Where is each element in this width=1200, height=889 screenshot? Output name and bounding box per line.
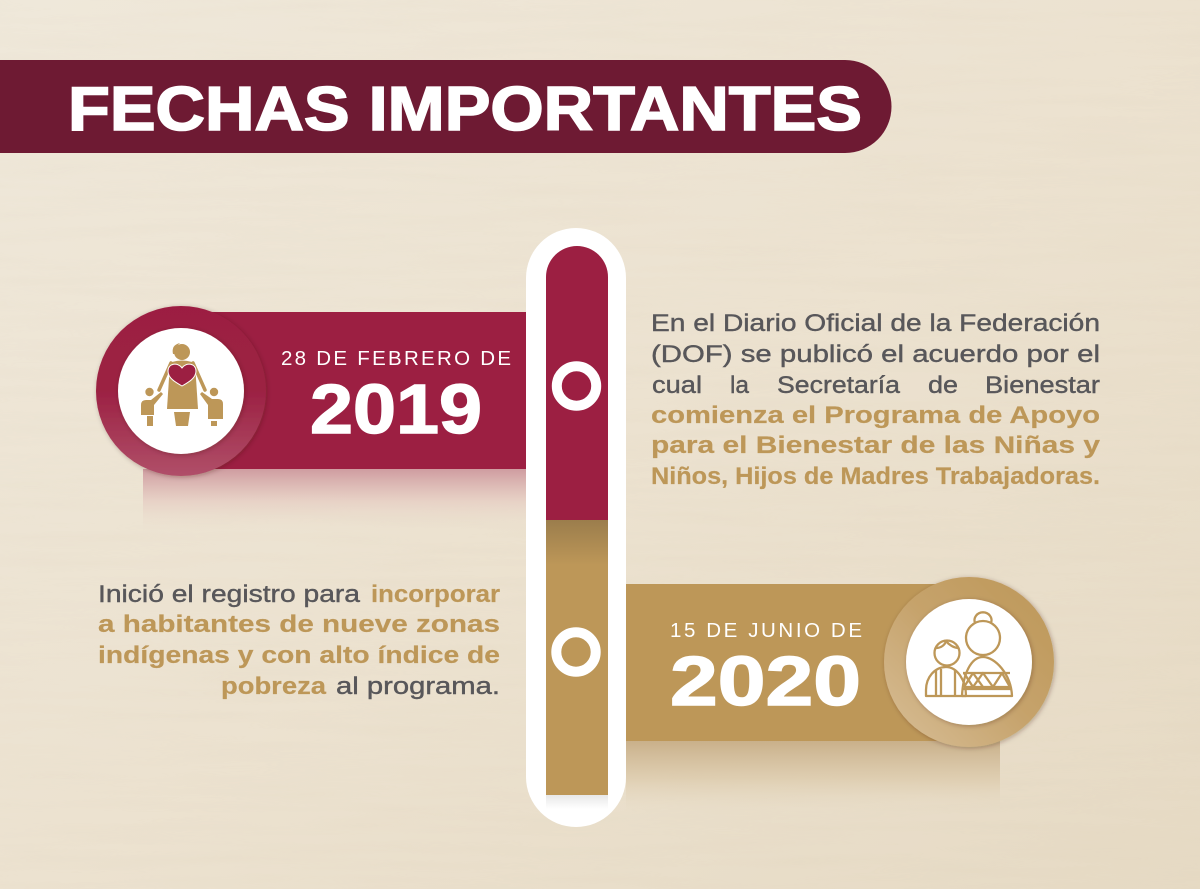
text block: 2020 description: indígenas y con alto índice de <box>98 642 500 669</box>
date label 2020: 15 DE JUNIO DE <box>670 619 862 642</box>
crimson segment <box>546 246 608 520</box>
panel: 2020 date band <box>626 584 1000 816</box>
marker 2019 <box>557 366 596 406</box>
text block: 2020 description: al programa. <box>336 673 500 700</box>
timeline bar <box>526 228 626 827</box>
gold segment <box>546 520 608 795</box>
text block: 2020 description <box>98 581 500 700</box>
panel: 2019 date band <box>143 312 526 533</box>
text block: 2019 description <box>651 310 1101 490</box>
text block: 2019 description: Niños, Hijos de Madres Trabajadoras. <box>651 463 1100 490</box>
title: FECHAS IMPORTANTES <box>68 75 862 144</box>
year 2020: 2020 <box>670 642 861 720</box>
text block: 2019 description: de <box>928 372 958 399</box>
icon: indigenous woman and child <box>884 577 1054 747</box>
text block: 2020 description: a habitantes de nueve zonas <box>98 611 500 638</box>
date label 2019: 28 DE FEBRERO DE <box>281 347 511 370</box>
text block: 2020 description: pobreza <box>221 673 327 700</box>
text block: 2019 description: (DOF) se publicó el acuerdo por el <box>651 341 1100 368</box>
year 2019: 2019 <box>310 370 482 448</box>
text block: 2020 description: incorporar <box>371 581 500 608</box>
text block: 2019 description: cual <box>652 372 702 399</box>
text block: 2019 description: la <box>730 372 750 399</box>
text block: 2019 description: Secretaría <box>777 372 901 399</box>
text block: 2020 description: Inició el registro para <box>98 581 361 608</box>
marker 2020 <box>556 632 596 672</box>
text block: 2019 description: para el Bienestar de las Niñas y <box>651 432 1101 459</box>
title banner <box>0 60 892 153</box>
icon: mother with children <box>96 306 266 476</box>
text block: 2019 description: En el Diario Oficial de la Federación <box>651 310 1100 337</box>
text block: 2019 description: Bienestar <box>985 372 1100 399</box>
text block: 2019 description: comienza el Programa de Apoyo <box>651 402 1100 429</box>
